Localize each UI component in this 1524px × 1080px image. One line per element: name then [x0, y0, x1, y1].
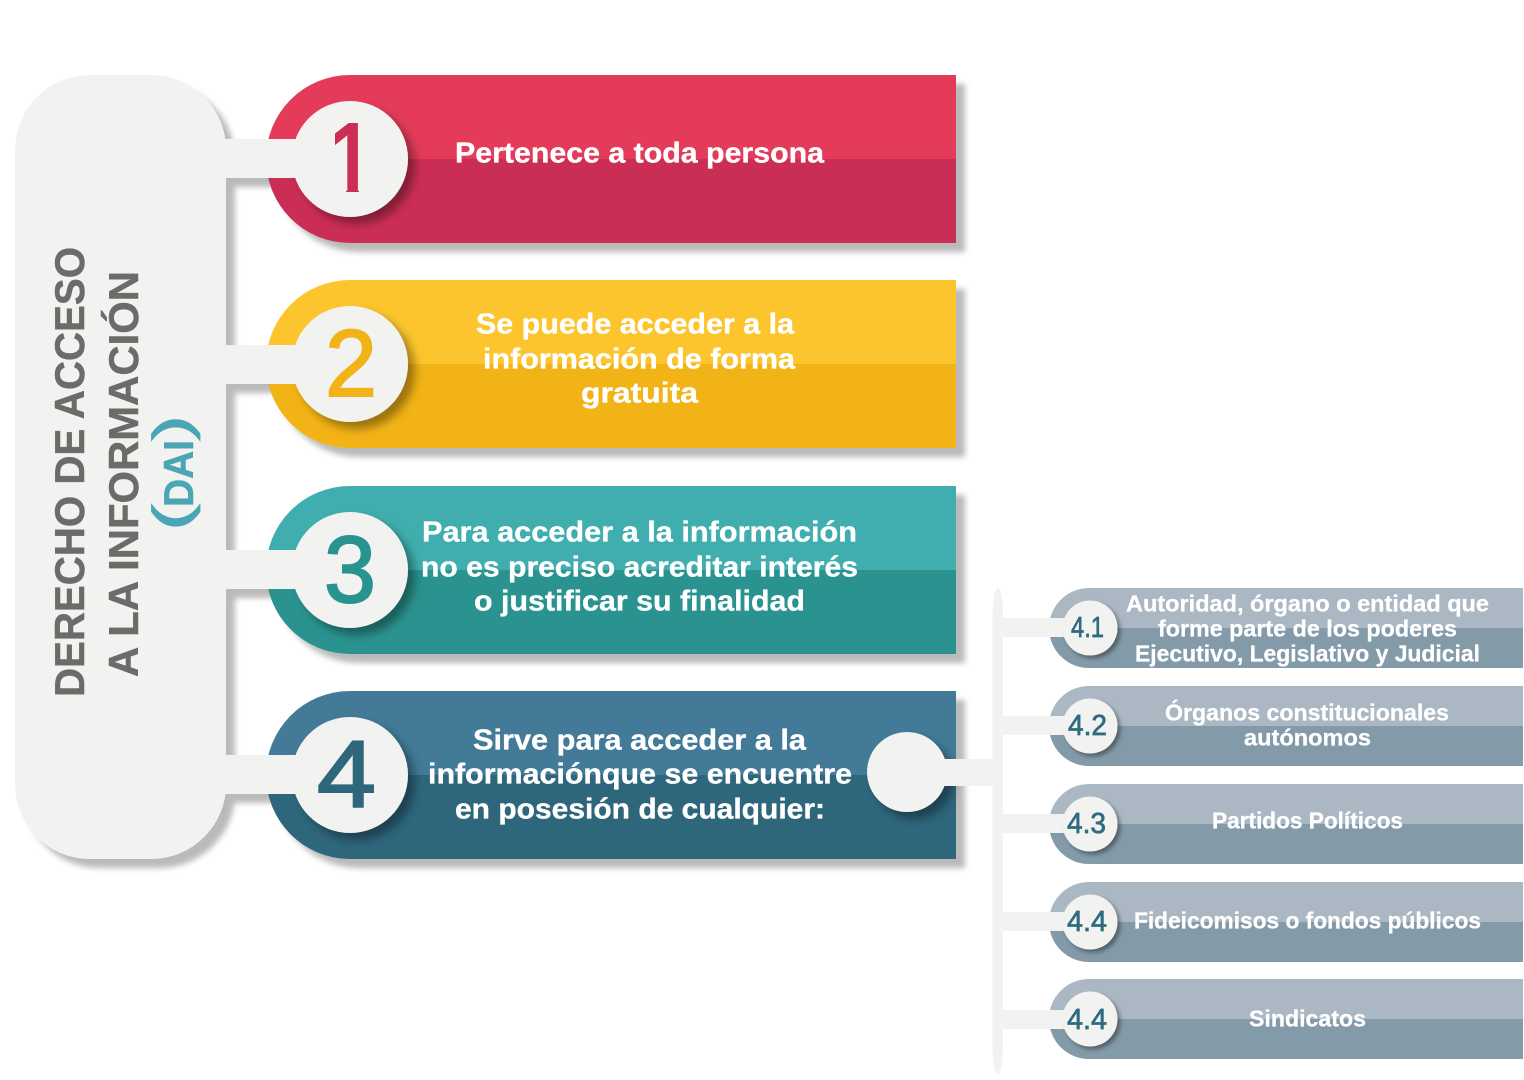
- sub-item 4.4 sindicatos: 4.4: [1067, 1004, 1107, 1036]
- heading: rotated title: DAI: [155, 440, 202, 507]
- heading: rotated title: A LA INFORMACIÓN: [99, 271, 147, 677]
- sub-item 4.2: Órganos constitucionales: [1165, 698, 1449, 726]
- bar 3: teal: no es preciso acreditar interés: [421, 552, 858, 584]
- sub-item 4.2: 4.2: [1068, 710, 1107, 742]
- bar 4: blue: en posesión de cualquier:: [455, 794, 825, 826]
- heading: rotated title: (: [143, 503, 201, 531]
- sub-item 4.4 fideicomisos: 4.4: [1067, 906, 1107, 938]
- sub-item 4.2: autónomos: [1244, 724, 1371, 750]
- bar 2: yellow: gratuita: [581, 378, 699, 410]
- sub-item 4.3: [1040, 784, 1523, 864]
- heading: rotated title: [46, 247, 202, 697]
- bar 4: blue: informaciónque se encuentre: [428, 758, 852, 790]
- bar 1: red: 1: [323, 101, 378, 224]
- bar 3: teal: Para acceder a la información: [422, 516, 857, 548]
- bar 4: blue: Sirve para acceder a la: [473, 724, 807, 756]
- connector tree to sub-items: [867, 588, 1060, 1074]
- sub-item 4.4 fideicomisos: Fideicomisos o fondos públicos: [1134, 908, 1481, 934]
- bar 3: teal: o justificar su finalidad: [474, 586, 805, 618]
- sub-item 4.3: Partidos Políticos: [1212, 808, 1403, 834]
- bar 2: yellow: información de forma: [483, 344, 796, 376]
- main rounded panel with connector arms: [15, 75, 290, 859]
- bar 2: yellow: Se puede acceder a la: [476, 308, 795, 340]
- sub-item 4.1: forme parte de los poderes: [1158, 616, 1457, 642]
- bar 1: red: Pertenece a toda persona: [455, 138, 825, 170]
- bar 4: blue: [260, 691, 956, 859]
- bar 3: teal: [260, 486, 956, 654]
- sub-item 4.2: [1040, 686, 1523, 766]
- panel: derecho de acceso a la información: [15, 75, 290, 859]
- heading: rotated title: DERECHO DE ACCESO: [46, 247, 93, 697]
- bar 2: yellow: [260, 280, 956, 448]
- sub-item 4.4 sindicatos: Sindicatos: [1249, 1006, 1366, 1032]
- bar 1: red: [260, 75, 956, 243]
- sub-item 4.3: 4.3: [1067, 808, 1106, 840]
- bar 3: teal: 3: [324, 517, 376, 623]
- sub-item 4.1: 4.1: [1071, 612, 1104, 644]
- sub-item 4.4 fideicomisos: [1040, 882, 1523, 962]
- sub-item 4.1: Ejecutivo, Legislativo y Judicial: [1135, 640, 1480, 666]
- heading: rotated title: ): [143, 415, 201, 441]
- sub-item 4.4 sindicatos: [1040, 979, 1523, 1059]
- bar 2: yellow: 2: [325, 311, 377, 417]
- bar 4: blue: 4: [317, 722, 376, 828]
- sub-item 4.1: Autoridad, órgano o entidad que: [1126, 590, 1489, 616]
- sub-item 4.1: [1040, 588, 1523, 668]
